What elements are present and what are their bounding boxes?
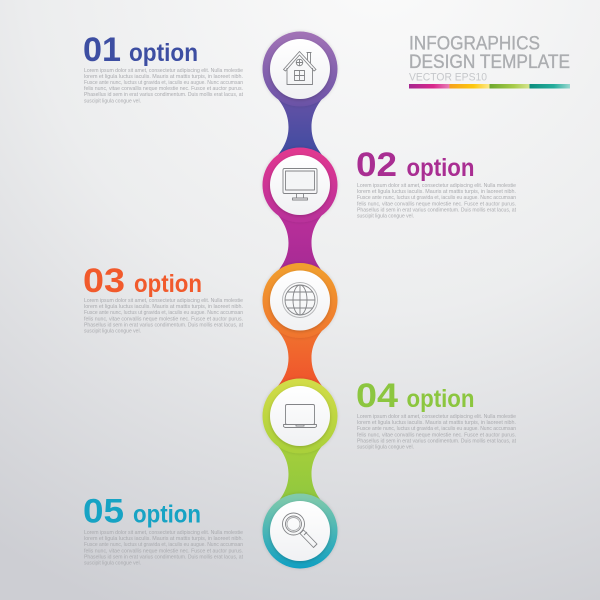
number 02: 02 (356, 146, 397, 184)
connector 2 to 3 (270, 206, 330, 278)
ring 5 (262, 494, 338, 568)
body text: felis nunc, vitae convallis neque molestie nec. Fusce et auctor purus. (84, 316, 243, 322)
body text: lorem et ligula luctus iaculis. Mauris at mattis turpis, in laoreet nibh. (357, 189, 516, 195)
body text: Lorem ipsum dolor sit amet, consectetur adipiscing elit. Nulla molestie (84, 298, 243, 304)
heading: design template: DESIGN TEMPLATE (409, 51, 570, 73)
body text (84, 68, 243, 104)
body text: felis nunc, vitae convallis neque molestie nec. Fusce et auctor purus. (84, 548, 243, 554)
title block (409, 32, 570, 88)
body text: lorem et ligula luctus iaculis. Mauris at mattis turpis, in laoreet nibh. (84, 536, 243, 542)
body text: Fusce ante nunc, luctus ut gravida et, iaculis eu augue. Nunc accumsan (84, 542, 243, 548)
body text: felis nunc, vitae convallis neque molestie nec. Fusce et auctor purus. (84, 86, 243, 92)
body text: felis nunc, vitae convallis neque molestie nec. Fusce et auctor purus. (357, 201, 516, 207)
body text (357, 183, 516, 220)
body text: suscipit ligula congue vel. (357, 444, 414, 450)
body text: Lorem ipsum dolor sit amet, consectetur adipiscing elit. Nulla molestie (84, 68, 243, 74)
icon: house (284, 52, 316, 84)
body text: Fusce ante nunc, luctus ut gravida et, iaculis eu augue. Nunc accumsan (357, 426, 516, 432)
body text: suscipit ligula congue vel. (357, 214, 414, 220)
icon: globe (282, 282, 318, 318)
body text: Phasellus id sem in erat varius condimentum. Duis mollis erat lacus, at (84, 554, 243, 560)
ring 1 (262, 32, 338, 106)
body text: lorem et ligula luctus iaculis. Mauris at mattis turpis, in laoreet nibh. (357, 420, 516, 426)
disc 3 (270, 270, 330, 330)
body text: felis nunc, vitae convallis neque molestie nec. Fusce et auctor purus. (357, 432, 516, 438)
body text: Lorem ipsum dolor sit amet, consectetur adipiscing elit. Nulla molestie (357, 183, 516, 189)
body text: Phasellus id sem in erat varius condimentum. Duis mollis erat lacus, at (84, 322, 243, 328)
body text: Lorem ipsum dolor sit amet, consectetur adipiscing elit. Nulla molestie (357, 414, 516, 420)
body text: suscipit ligula congue vel. (84, 560, 141, 566)
label option: option (129, 39, 198, 67)
body text: Phasellus id sem in erat varius condimentum. Duis mollis erat lacus, at (357, 207, 516, 213)
number 01: 01 (83, 31, 121, 69)
option 03 (83, 262, 243, 334)
body text (357, 414, 516, 450)
ring 2 (262, 148, 338, 222)
disc 5 (270, 501, 330, 561)
option 02 (356, 146, 516, 220)
body text (84, 530, 243, 566)
connector 3 to 4 (270, 322, 330, 393)
body text: Phasellus id sem in erat varius condimentum. Duis mollis erat lacus, at (84, 92, 243, 98)
disc 2 (270, 155, 330, 215)
label option: option (406, 385, 474, 413)
body text (84, 298, 243, 334)
connector 4 to 5 (270, 437, 330, 509)
icon: magnifier (282, 513, 317, 548)
number 03: 03 (83, 262, 125, 300)
icon: monitor (283, 168, 317, 200)
disc 4 (270, 386, 330, 446)
subheading: vector eps10: VECTOR EPS10 (409, 72, 487, 84)
connector 1 to 2 (270, 90, 330, 162)
body text: lorem et ligula luctus iaculis. Mauris at mattis turpis, in laoreet nibh. (84, 304, 243, 310)
option 05 (83, 492, 243, 566)
body text: suscipit ligula congue vel. (84, 328, 141, 334)
heading: infographics: INFOGRAPHICS (409, 32, 540, 54)
number 04: 04 (356, 377, 398, 415)
label option: option (134, 270, 202, 298)
colour strip (409, 84, 570, 88)
body text: Fusce ante nunc, luctus ut gravida et, iaculis eu augue. Nunc accumsan (84, 310, 243, 316)
label option: option (133, 500, 201, 528)
option 01 (83, 31, 243, 104)
disc 1 (270, 39, 330, 99)
ring 3 (262, 263, 338, 338)
icon: laptop (284, 404, 316, 428)
number 05: 05 (83, 492, 124, 530)
body text: Lorem ipsum dolor sit amet, consectetur adipiscing elit. Nulla molestie (84, 530, 243, 536)
timeline connectors (270, 90, 330, 509)
body text: suscipit ligula congue vel. (84, 98, 141, 104)
body text: Phasellus id sem in erat varius condimentum. Duis mollis erat lacus, at (357, 438, 516, 444)
option 04 (356, 377, 516, 450)
ring 4 (262, 378, 338, 454)
body text: Fusce ante nunc, luctus ut gravida et, iaculis eu augue. Nunc accumsan (357, 195, 516, 201)
body text: lorem et ligula luctus iaculis. Mauris at mattis turpis, in laoreet nibh. (84, 74, 243, 80)
body text: Fusce ante nunc, luctus ut gravida et, iaculis eu augue. Nunc accumsan (84, 80, 243, 86)
label option: option (406, 154, 474, 182)
